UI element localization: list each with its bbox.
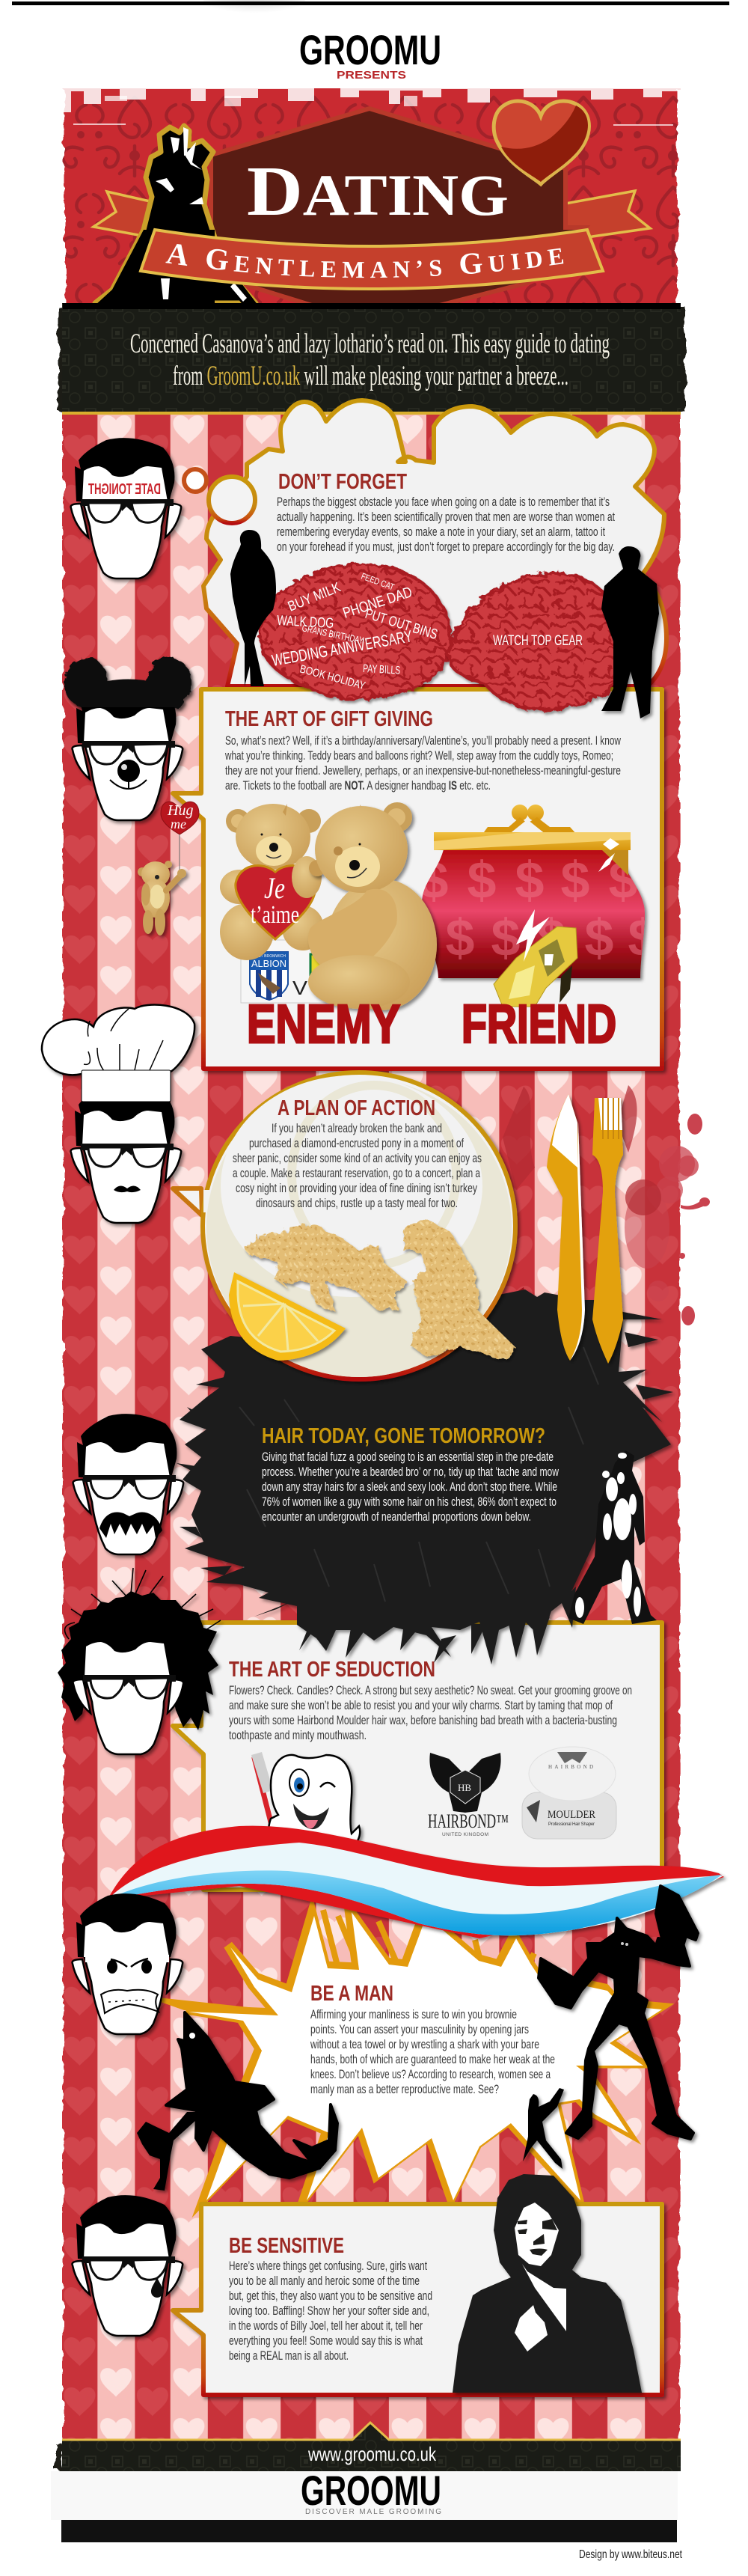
panel: be a man burst <box>144 1910 662 2200</box>
illustration: brain with to-do list: BUY MILK <box>286 579 343 615</box>
heart: Je t'aime: t’aime <box>251 901 299 929</box>
food: dinosaur nugget right <box>402 1218 515 1361</box>
body text: don't forget: Perhaps the biggest obstacle you face when going on a date is to remember that it’s <box>277 495 610 509</box>
illustration: red purse: $ <box>609 851 637 909</box>
body text: be sensitive <box>229 2259 432 2363</box>
illustration: match ticket <box>241 940 360 1003</box>
body text: hair today: 76% of women like a guy with some hair on his chest, 86% don’t expect to <box>262 1495 557 1509</box>
body text: plan of action: a couple. Make a restaurant reservation, go to a concert, plan a <box>233 1166 480 1180</box>
illustration: right teddy bear <box>308 802 437 1010</box>
panel: don't forget cloud <box>184 400 666 686</box>
illustration: brain with to-do list: PAY BILLS <box>363 662 401 677</box>
body text: be sensitive: you to be all manly and heroic some of the time <box>229 2274 420 2288</box>
portrait: Billy Joel stencil <box>453 2174 642 2393</box>
illustration: toothpaste wave <box>108 1826 724 1938</box>
silhouette: woman <box>230 530 276 686</box>
silhouette: man <box>601 546 659 718</box>
big moustache <box>99 1513 162 1538</box>
logo: Hairbond: UNITED KINGDOM <box>442 1832 489 1837</box>
panel: footer paper strip <box>51 2471 678 2520</box>
plate: a plan of action <box>173 1072 515 1379</box>
body text: plan of action: cosy night in or providing your idea of fine dining isn’t turkey <box>236 1181 477 1195</box>
body text: don't forget <box>277 495 615 554</box>
illustration: left teddy bear with heart <box>220 804 324 960</box>
panel: art of seduction box <box>173 1623 662 1890</box>
illustration: brain with to-do list: WEDDING ANNIVERSARY <box>271 626 414 670</box>
character: big moustache head <box>73 1414 183 1554</box>
body text: be sensitive: everything you feel! Some would say this is what <box>229 2334 423 2348</box>
body text: be sensitive: loving too. Baffling! Show her your softer side and, <box>229 2304 429 2318</box>
body text: gift giving: are. Tickets to the football are NOT. A designer handbag IS etc. etc. <box>225 778 491 793</box>
illustration: red purse: $ <box>515 851 544 909</box>
silhouette: soldier with gun <box>523 2088 564 2169</box>
food: dinosaur nugget left <box>245 1224 408 1312</box>
illustration: red purse: $ <box>628 909 657 967</box>
illustration: brain with to-do list: WALK DOG <box>277 613 334 632</box>
character: wild hair head <box>58 1568 221 1754</box>
product: moulder jar <box>522 1747 616 1839</box>
heading: don't forget: DON’T FORGET <box>278 470 407 494</box>
heading: art of seduction: THE ART OF SEDUCTION <box>229 1658 435 1682</box>
logo: GroomU: GROOMU <box>299 26 441 73</box>
text: design credit: Design by www.biteus.net <box>579 2548 682 2561</box>
text: mirrored date tonight: DATE TONIGHT <box>88 481 161 498</box>
label: friend: FRIEND <box>462 995 616 1054</box>
icon: knife <box>547 1094 585 1361</box>
body text: plan of action: purchased a diamond-encrusted pony in a moment of <box>249 1136 464 1150</box>
crest: West Brom: WEST BROMWICH <box>252 954 286 959</box>
panel: art of gift giving box <box>173 689 662 1069</box>
body text: be a man: without a tea towel or by wrestling a shark with your bare <box>310 2037 539 2051</box>
body text: gift giving <box>224 733 621 793</box>
body text: be sensitive: Here’s where things get confusing. Sure, girls want <box>229 2259 427 2273</box>
body text: art of seduction <box>229 1683 632 1742</box>
icon: fork <box>592 1098 623 1364</box>
character: angry head <box>73 1893 183 2034</box>
illustration: brain with to-do list: PHONE DAD <box>341 584 414 622</box>
body text: hair today: Giving that facial fuzz a good seeing to is an essential step in the pre-date <box>262 1450 554 1464</box>
illustration: red purse: $ <box>585 909 613 967</box>
crest: West Brom <box>250 952 288 1000</box>
illustration: brain with top gear: WATCH TOP GEAR <box>493 633 583 649</box>
icon: heart <box>494 101 589 184</box>
crest: West Brom: ALBION <box>251 958 286 969</box>
title: Dating: DATING <box>247 153 509 231</box>
body text: plan of action: dinosaurs and chips, rustle up a tasty meal for two. <box>256 1196 458 1210</box>
body text: plan of action <box>233 1121 482 1210</box>
illustration: diamond ring <box>494 909 577 1007</box>
illustration: smiling tooth <box>269 1755 360 1880</box>
illustration: red purse: $ <box>491 909 520 967</box>
body text: hair today: down any stray hairs for a sleek and sexy look. And don’t stop there. While <box>262 1480 557 1494</box>
body text: hair today: process. Whether you’re a bearded bro’ or no, tidy up that ’tache and mow <box>262 1465 560 1479</box>
heading: hair today: HAIR TODAY, GONE TOMORROW? <box>262 1424 545 1448</box>
body text: be a man: points. You can assert your masculinity by opening jars <box>310 2022 529 2036</box>
body text: plan of action: sheer panic, consider some kind of an activity you can enjoy as <box>233 1151 482 1165</box>
panel: black intro band <box>58 303 685 415</box>
silhouette: shark <box>166 2012 337 2178</box>
panel: header with damask background <box>57 84 687 307</box>
ribbon tails behind the badge <box>94 191 650 243</box>
icon: Hug me balloon heart with mini bear <box>138 802 199 936</box>
icon: tear <box>151 2277 163 2298</box>
icon: chef hat <box>42 1005 194 1102</box>
panel: striped heart background <box>45 415 699 2443</box>
ribbon: A Gentleman's Guide: A GENTLEMAN’S GUIDE <box>165 244 564 278</box>
silhouette: neanderthal <box>568 1450 657 1624</box>
body text: hair today: encounter an undergrowth of neanderthal proportions down below. <box>262 1510 531 1524</box>
label: enemy: ENEMY <box>247 995 400 1054</box>
blood splatter <box>448 1085 710 1395</box>
text: discover male grooming: DISCOVER MALE GROOMING <box>305 2508 441 2516</box>
product: moulder jar: HAIRBOND <box>548 1764 593 1770</box>
illustration: brain with to-do list: BOOK HOLIDAY <box>298 662 367 692</box>
top black bar <box>12 0 729 25</box>
body text: plan of action: If you haven’t already broken the bank and <box>272 1121 442 1135</box>
illustration: red purse: $ <box>537 909 565 967</box>
mini teddy bear <box>138 861 186 936</box>
clenched mouth <box>101 1990 159 2013</box>
body text: don't forget: actually happening. It’s been scientifically proven that men are worse than women at <box>277 510 615 524</box>
text: versus: V <box>292 977 308 999</box>
body text: be sensitive: in the words of Billy Joel, tell her about it, tell her <box>229 2319 423 2333</box>
character: crying head <box>73 2195 183 2336</box>
illustration: red purse: $ <box>561 851 589 909</box>
illustration: brain with to-do list: GRANS BIRTHDAY <box>301 622 365 646</box>
product: moulder jar: MOULDER <box>548 1809 595 1821</box>
silhouette: robot alien <box>539 1886 698 2139</box>
logo: Hairbond: HAIRBOND™ <box>428 1810 509 1832</box>
food: lemon wedge <box>229 1272 346 1361</box>
character: chef head <box>42 1005 194 1223</box>
illustration: brain with to-do list: PUT OUT BINS <box>364 606 439 643</box>
body text: art of seduction: toothpaste and minty mouthwash. <box>229 1728 367 1742</box>
heading: be a man: BE A MAN <box>310 1982 393 2006</box>
illustration: red purse: $ <box>420 851 448 909</box>
logo: Hairbond: HB <box>458 1782 471 1793</box>
body text: be a man: hands, both of which are guaranteed to make her weak at the <box>310 2052 555 2066</box>
body text: be a man: knees. Don’t believe us? According to research, women see a <box>310 2067 551 2081</box>
panel: bottom black band <box>61 2520 677 2542</box>
body text: be a man: Affirming your manliness is sure to win you brownie <box>310 2007 517 2021</box>
angry eyes <box>107 1960 117 1974</box>
illustration: brain with to-do list <box>260 564 450 699</box>
text: website: www.groomu.co.uk <box>307 2443 437 2465</box>
body text: don't forget: on your forehead if you must, just don’t forget to prepare accordingly for the big day. <box>277 540 615 554</box>
panel: footer band <box>55 2423 681 2471</box>
illustration: toothbrush <box>251 1752 276 1843</box>
black spiky hair panel <box>177 1289 673 1664</box>
illustration: red purse: $ <box>468 851 496 909</box>
logo: Hairbond <box>428 1753 509 1837</box>
crest: Norwich <box>310 954 352 977</box>
heart: Je t'aime: Je <box>264 871 285 905</box>
icon: Hug me balloon heart with mini bear: me <box>171 817 186 831</box>
icon: Hug me balloon heart with mini bear: Hug <box>167 802 193 819</box>
illustration: dancing couple <box>95 126 258 305</box>
text: presents: PRESENTS <box>337 69 406 82</box>
character: head with mouse-ear hair and bear nose <box>64 657 191 820</box>
badge: brown hexagon <box>211 109 585 323</box>
heart: Je t'aime <box>236 866 316 939</box>
body text: be sensitive: but, get this, they also want you to be sensitive and <box>229 2289 432 2303</box>
body text: hair today <box>262 1450 560 1524</box>
panel: be sensitive box <box>173 2204 662 2395</box>
logo: GroomU footer: GROOMU <box>301 2467 441 2514</box>
heading: be sensitive: BE SENSITIVE <box>229 2234 344 2258</box>
illustration: brain with to-do list: FEED CAT <box>360 571 396 593</box>
illustration: red purse: $ <box>446 909 474 967</box>
body text: be a man: manly man as a better reproductive mate. See? <box>310 2082 499 2096</box>
moustache <box>114 1185 141 1192</box>
intro text <box>130 329 610 391</box>
character: forgetful head <box>71 438 181 579</box>
product: moulder jar: Professional Hair Shaper <box>548 1822 595 1827</box>
heading: art of gift giving: THE ART OF GIFT GIVING <box>225 707 433 731</box>
illustration: red purse <box>420 805 657 978</box>
heading: plan of action: A PLAN OF ACTION <box>278 1096 435 1120</box>
body text: don't forget: remembering everyday events, so make a note in your diary, set an alarm, tattoo it <box>277 525 605 539</box>
body text: be a man <box>310 2007 555 2096</box>
body text: be sensitive: being a REAL man is all about. <box>229 2348 349 2363</box>
illustration: brain with top gear <box>449 573 633 709</box>
ribbon: A Gentleman's Guide <box>138 228 605 290</box>
thought bubbles <box>184 469 255 523</box>
silhouette: kicking fighter <box>137 2112 197 2191</box>
